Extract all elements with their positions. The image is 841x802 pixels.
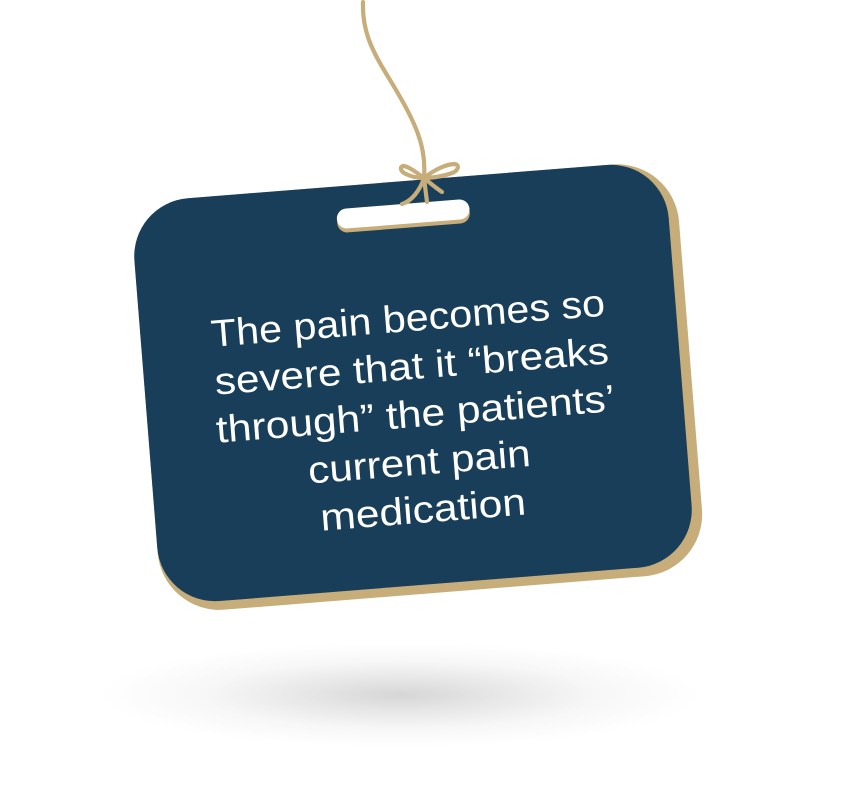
hanging tag [130, 160, 707, 615]
tag message text: current pain [307, 433, 532, 493]
ground shadow [100, 643, 700, 747]
tag message text: The pain becomes so [209, 283, 606, 356]
slot hole [336, 199, 471, 233]
string and bow [363, 2, 458, 204]
tag message text: medication [319, 481, 527, 540]
tag message text: severe that it “breaks [213, 330, 610, 404]
tag back layer [130, 160, 707, 615]
tag message text: through” the patients’ [215, 378, 617, 452]
tag message text [207, 282, 624, 547]
tag front panel [130, 160, 696, 606]
